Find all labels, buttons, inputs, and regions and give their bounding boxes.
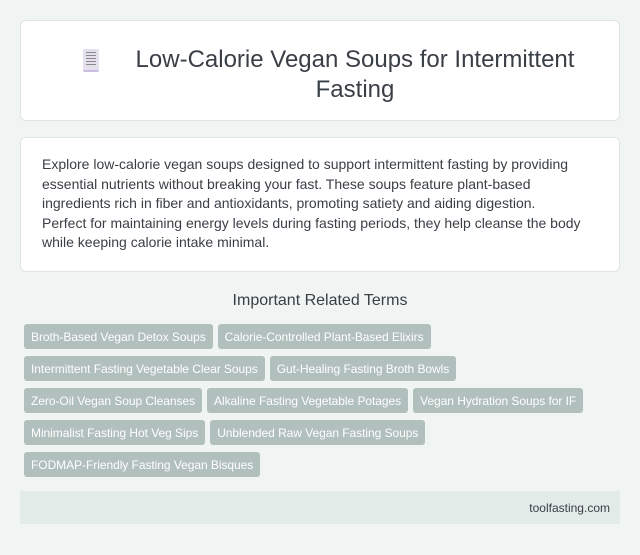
description card (20, 137, 620, 272)
tags: Vegan Hydration Soups for IF (420, 394, 576, 408)
description text: ingredients rich in fiber and antioxidants, promoting satiety and aiding digestion. (42, 195, 535, 211)
tags: Alkaline Fasting Vegetable Potages (214, 394, 401, 408)
description text (42, 156, 581, 250)
tags: FODMAP-Friendly Fasting Vegan Bisques (31, 458, 253, 472)
footer: toolfasting.com (529, 501, 610, 515)
footer (20, 491, 620, 524)
description text: Explore low-calorie vegan soups designed to support intermittent fasting by providing (42, 156, 568, 172)
tags (24, 324, 583, 477)
tags: Minimalist Fasting Hot Veg Sips (31, 426, 198, 440)
title: Low-Calorie Vegan Soups for Intermittent Fasting (136, 46, 574, 103)
description text: while keeping calorie intake minimal. (42, 234, 269, 250)
tags: Gut-Healing Fasting Broth Bowls (277, 362, 449, 376)
tags: Intermittent Fasting Vegetable Clear Soups (31, 362, 258, 376)
tags: Unblended Raw Vegan Fasting Soups (217, 426, 418, 440)
icon: document (83, 49, 99, 72)
tags: Zero-Oil Vegan Soup Cleanses (31, 394, 195, 408)
description text: essential nutrients without breaking your fast. These soups feature plant-based (42, 176, 530, 192)
tags: Calorie-Controlled Plant-Based Elixirs (225, 330, 424, 344)
heading: related terms: Important Related Terms (233, 292, 407, 309)
tags: Broth-Based Vegan Detox Soups (31, 330, 206, 344)
description text: Perfect for maintaining energy levels during fasting periods, they help cleanse the body (42, 214, 581, 230)
title card (20, 20, 620, 121)
